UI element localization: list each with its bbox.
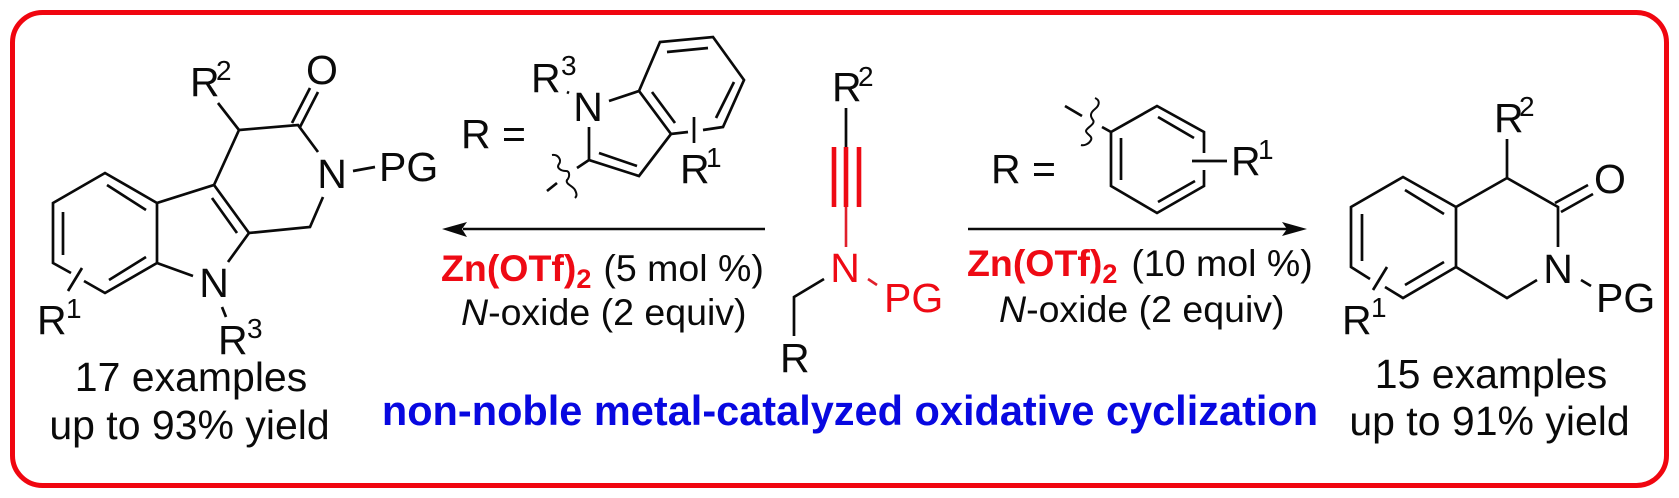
right arrow: [968, 222, 1307, 236]
label: R3: R: [218, 317, 248, 363]
right R definition: aryl fragment: R =: [991, 146, 1056, 192]
label: R1: [1342, 292, 1387, 343]
right product yield text: up to 91% yield: [1349, 398, 1630, 444]
label: lactam nitrogen: N: [317, 151, 347, 197]
label: R3: [531, 50, 577, 101]
label: indole nitrogen: N: [199, 260, 229, 306]
label: R2: [832, 61, 874, 110]
label: R2: R: [832, 64, 862, 110]
right conditions: Zn(OTf): [967, 242, 1102, 284]
left R definition: indolyl fragment: R =: [461, 111, 526, 157]
label: R1: R: [1231, 138, 1261, 184]
right conditions: (10 mol %): [1131, 242, 1313, 284]
icon: wavy bond cut: [552, 155, 576, 198]
alkyne triple bond: [834, 147, 859, 207]
label: N: N: [573, 84, 603, 130]
left arrow: [442, 222, 765, 237]
left conditions: (5 mol %): [603, 247, 764, 289]
left product yield text: [49, 354, 330, 448]
left product: tetrahydro-carbolinone molecule: [37, 47, 438, 363]
label: carbonyl oxygen: O: [306, 47, 338, 93]
label: R1: R: [37, 297, 67, 343]
label: R1: 1: [1258, 134, 1274, 165]
right conditions: 2: [1102, 259, 1117, 289]
label: R2: 2: [1519, 91, 1535, 122]
label: R1: 1: [66, 293, 82, 324]
label: nitrogen: N: [830, 245, 860, 291]
label: R1: 1: [1371, 292, 1387, 323]
label: R1: [680, 142, 722, 192]
label: lactam nitrogen: N: [1543, 246, 1573, 292]
right conditions: N-oxide (2 equiv): [999, 288, 1285, 330]
right product: isoquinolinone molecule: [1342, 91, 1655, 343]
label: PG: PG: [1596, 275, 1655, 321]
right product yield text: 15 examples: [1375, 351, 1607, 397]
caption: blue headline: non-noble metal-catalyzed oxidative cyclization: [382, 387, 1318, 434]
label: R3: R: [531, 55, 561, 101]
left R definition: indolyl fragment: [461, 37, 744, 198]
right product yield text: [1349, 351, 1630, 444]
label: R2: [1494, 91, 1535, 141]
label: carbonyl oxygen: O: [1594, 156, 1626, 202]
right conditions: [967, 242, 1313, 330]
label: R: R: [780, 335, 810, 381]
label: R2: 2: [216, 55, 232, 86]
left conditions: N-oxide (2 equiv): [461, 291, 747, 333]
central substrate: ynamide: [780, 61, 943, 381]
label: R1: 1: [706, 142, 722, 173]
label: R3: [218, 313, 263, 363]
label: R3: 3: [247, 313, 263, 344]
left conditions: [441, 247, 764, 333]
label: R1: R: [1342, 297, 1372, 343]
label: R2: 2: [858, 61, 874, 92]
left product yield text: 17 examples: [75, 354, 307, 400]
label: R3: 3: [561, 50, 577, 81]
label: R1: [37, 293, 82, 343]
label: R1: R: [680, 146, 710, 192]
left conditions: Zn(OTf): [441, 247, 576, 289]
label: R1: [1231, 134, 1274, 184]
icon: wavy bond cut: [1081, 98, 1099, 145]
label: PG: PG: [379, 144, 438, 190]
label: R2: R: [1494, 95, 1524, 141]
label: R2: R: [190, 59, 220, 105]
label: PG: PG: [884, 275, 943, 321]
right R definition: aryl fragment: [991, 98, 1274, 213]
left product yield text: up to 93% yield: [49, 402, 330, 448]
label: R2: [190, 55, 232, 105]
left conditions: 2: [576, 264, 591, 294]
